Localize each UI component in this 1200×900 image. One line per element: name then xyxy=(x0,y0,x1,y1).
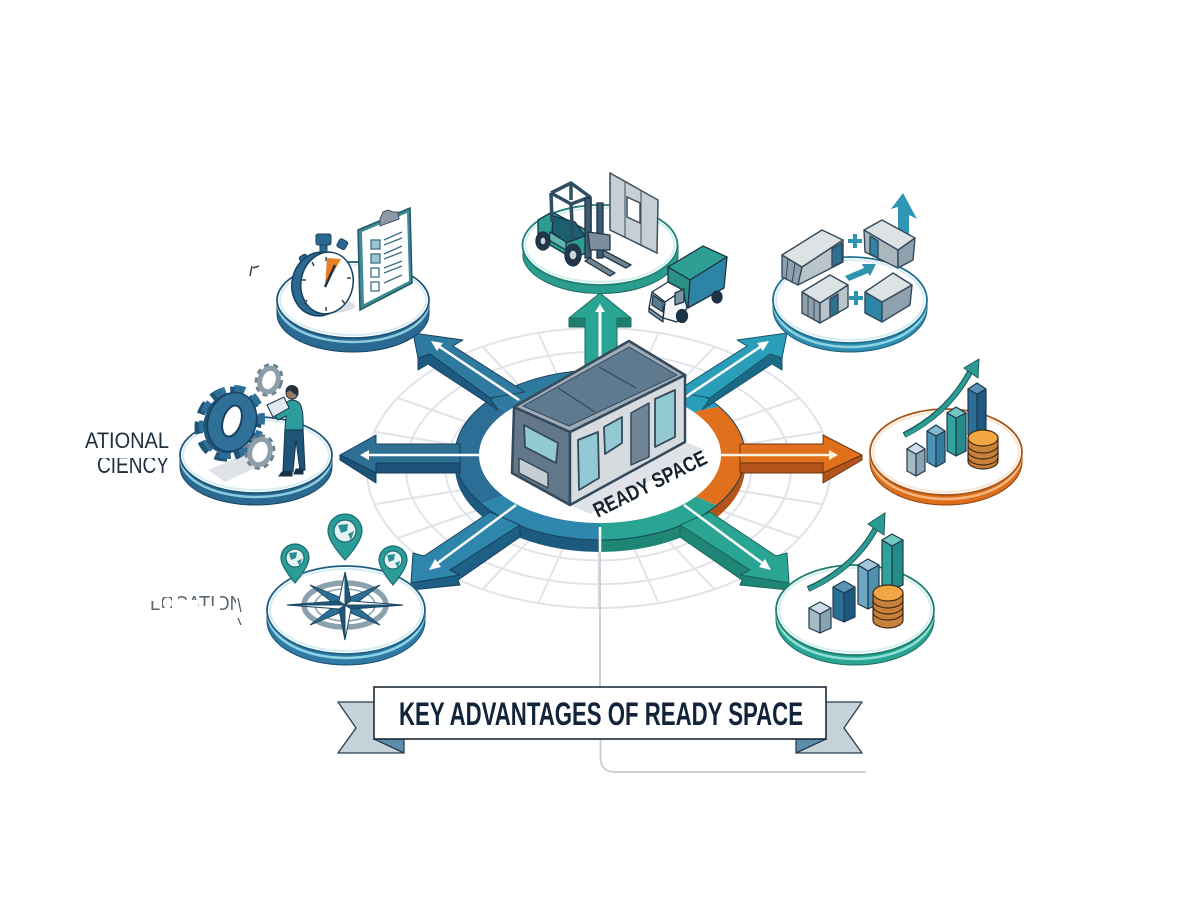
building roof xyxy=(514,341,685,432)
title banner xyxy=(338,687,862,753)
building right face xyxy=(570,375,685,505)
hub centre disc xyxy=(479,387,721,523)
icon: rising trend arrow xyxy=(904,359,979,435)
platform base xyxy=(870,409,1022,505)
icon: engineer with tablet xyxy=(267,385,305,476)
clipped side label: operational efficiency: ATIONAL xyxy=(85,428,169,453)
platform: return on investment xyxy=(776,513,934,665)
icon: coins xyxy=(873,585,903,628)
platform: speed of deployment xyxy=(277,208,429,352)
icon: coins xyxy=(968,430,998,469)
arrow: to return on investment xyxy=(680,505,789,590)
icon: gears xyxy=(190,362,285,482)
platform: logistics xyxy=(522,173,727,322)
platform base xyxy=(267,566,425,665)
arrow: to cost savings xyxy=(720,435,862,483)
arrow: to scalability xyxy=(675,333,787,410)
icon: stopwatch xyxy=(286,234,359,321)
platform: operational efficiency xyxy=(180,362,332,505)
banner left ribbon xyxy=(338,702,404,753)
label: ready space: READY SPACE xyxy=(590,447,711,522)
banner title text: KEY ADVANTAGES OF READY SPACE xyxy=(399,696,803,732)
icon: clipboard checklist xyxy=(358,208,412,310)
bar chart xyxy=(809,534,903,633)
clipped side label: operational efficiency xyxy=(85,432,168,473)
building left face xyxy=(512,407,570,505)
arrow: to logistics xyxy=(569,293,631,370)
platform: cost savings xyxy=(870,359,1022,505)
banner right ribbon xyxy=(796,702,862,753)
bar chart xyxy=(907,383,986,476)
central hub ring xyxy=(456,370,744,552)
platform base xyxy=(180,417,332,505)
icon: compass rose xyxy=(287,572,403,640)
clipped side label: location xyxy=(152,596,242,626)
icon: modular units xyxy=(782,220,915,323)
modular building xyxy=(512,341,705,514)
icon: growth arrow xyxy=(891,193,917,236)
arrow: to speed xyxy=(413,333,525,410)
clipped side label: location: LOCATION xyxy=(150,593,243,615)
icon: plus signs and arrow xyxy=(845,234,876,305)
clipped side label remnant: speed xyxy=(250,266,259,276)
clipped side label: operational efficiency: CIENCY xyxy=(97,452,169,479)
platform base xyxy=(773,257,927,352)
icon: delivery truck xyxy=(649,246,727,322)
platform base xyxy=(776,565,934,665)
arrow: to operational efficiency xyxy=(340,435,480,483)
platform base xyxy=(522,205,678,293)
icon: location pins xyxy=(281,514,407,585)
platform: scalability xyxy=(773,193,927,352)
connector line to title xyxy=(600,552,866,772)
icon: forklift xyxy=(536,183,631,276)
icon: rising trend arrow xyxy=(808,513,885,589)
icon: prefab wall panel xyxy=(610,173,658,253)
arrow: to location flexibility xyxy=(411,505,520,590)
platform: location flexibility xyxy=(267,514,425,665)
building shadow xyxy=(570,442,705,514)
background radial grid xyxy=(366,328,830,608)
banner panel xyxy=(374,687,826,739)
platform base xyxy=(277,262,429,352)
